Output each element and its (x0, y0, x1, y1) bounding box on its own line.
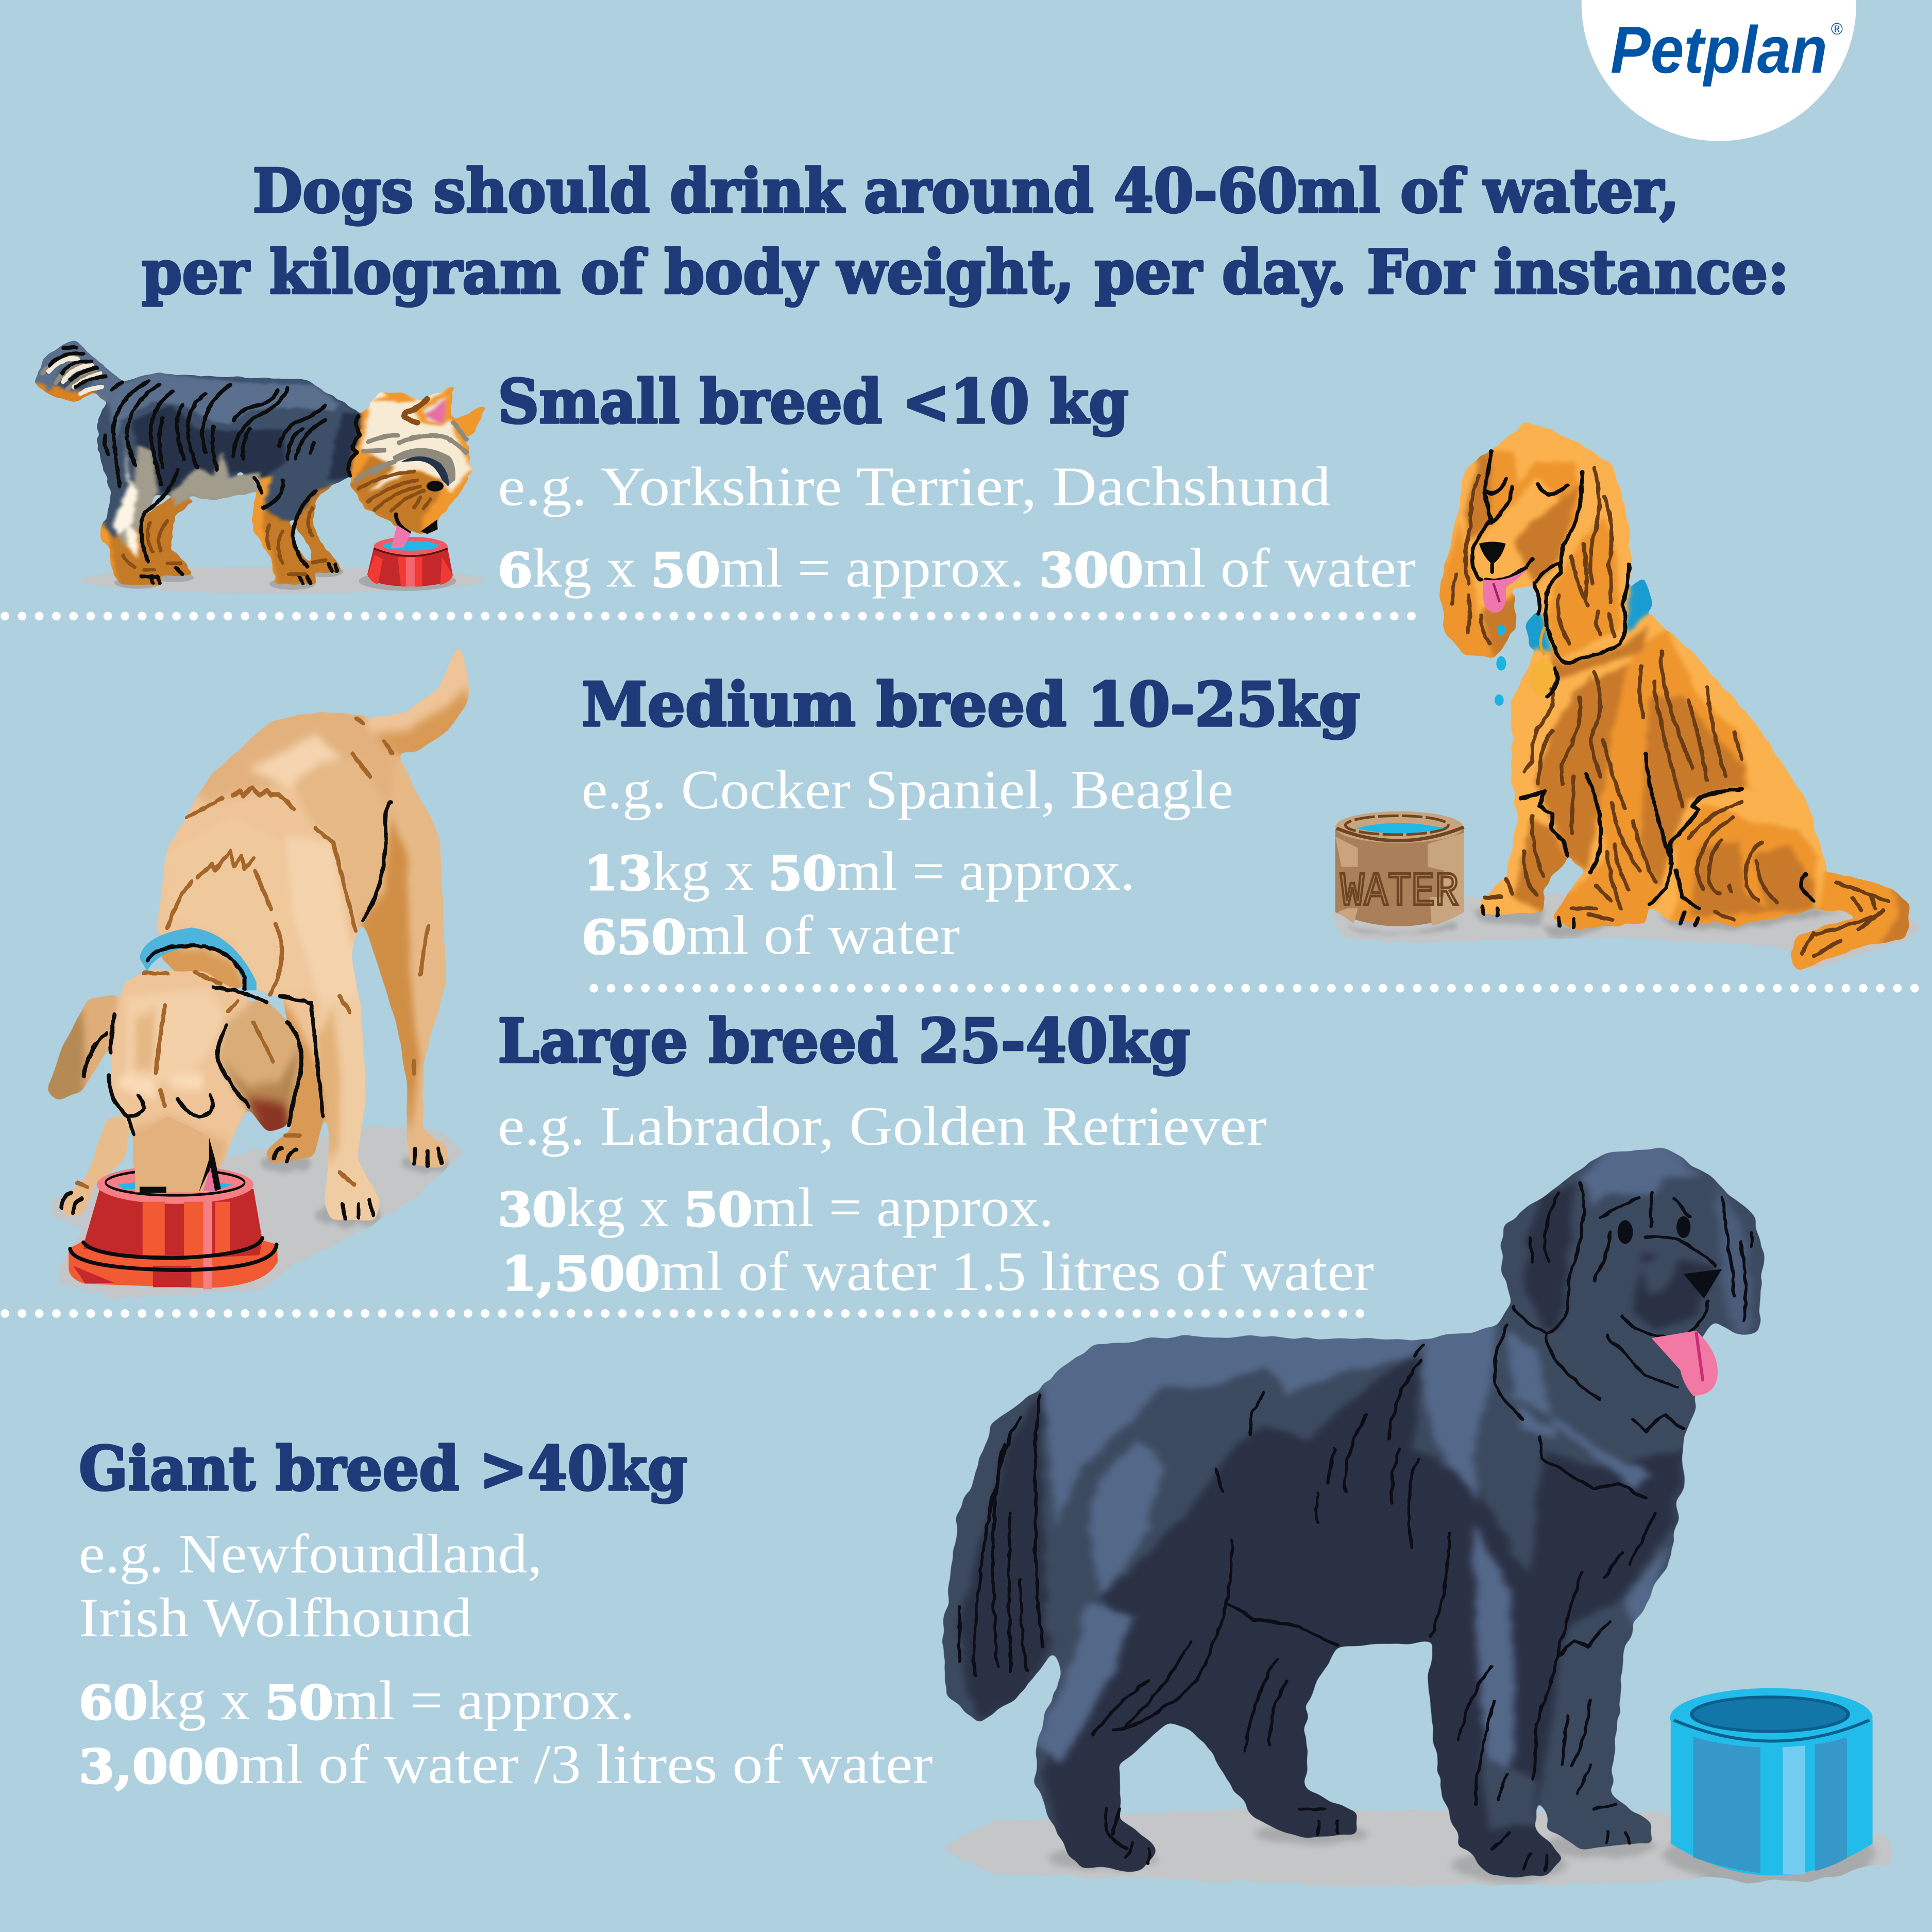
examples: giant breed: e.g. Newfoundland, (79, 1523, 542, 1585)
light back (1043, 1335, 1427, 1528)
dog line work (61, 718, 441, 1219)
logo: Petplan badge: Petplan (1611, 13, 1827, 87)
belly and chest white fur (171, 451, 260, 507)
examples: small breed: e.g. Yorkshire Terrier, Dachshund (498, 456, 1331, 518)
coat (98, 373, 362, 538)
bowl (1670, 1688, 1873, 1875)
illustration: yorkshire terrier drinking (35, 341, 486, 594)
result: large breed: 1,500 ml of water 1.5 litres of water (501, 1241, 1374, 1302)
head base (351, 403, 471, 534)
dog body fills (58, 646, 469, 1219)
logo: Petplan badge: ® (1831, 20, 1843, 38)
heading: medium breed: Medium breed 10-25kg (582, 669, 1360, 740)
ground shadow (51, 1127, 464, 1298)
nose (1684, 1269, 1722, 1299)
result: medium breed: 650 ml of water (582, 905, 960, 966)
water barrel (1335, 811, 1464, 926)
water drops (1495, 624, 1506, 706)
title: per kilogram of body weight, per day. For instance: (142, 236, 1789, 308)
result: giant breed: 3,000 ml of water /3 litres of water (79, 1734, 933, 1795)
title (142, 155, 1789, 308)
head fur (362, 386, 470, 494)
heading: large breed: Large breed 25-40kg (498, 1006, 1190, 1077)
tail (35, 341, 123, 403)
tongue (1651, 1331, 1718, 1396)
dog body fills (943, 1148, 1764, 1875)
dog line work (959, 1183, 1751, 1871)
examples: large breed: e.g. Labrador, Golden Retriever (498, 1096, 1267, 1157)
calculation: small breed: 6kg x 50ml = approx. 300 ml of water (498, 537, 1416, 599)
heading: giant breed: Giant breed >40kg (79, 1433, 688, 1504)
examples: medium breed: e.g. Cocker Spaniel, Beagle (582, 759, 1233, 821)
dark underside (1043, 1350, 1684, 1875)
panel: giant breed text (79, 1433, 933, 1795)
panel: large breed text (498, 1006, 1374, 1302)
title: Dogs should drink around 40-60ml of water, (252, 155, 1680, 226)
head (1568, 1148, 1722, 1341)
bowl (367, 537, 453, 587)
illustration: spaniel with water bowl (1331, 422, 1921, 972)
collar (140, 927, 257, 990)
eye (427, 481, 444, 492)
logo: Petplan badge (1582, 0, 1856, 141)
dog line work (43, 347, 467, 583)
tail (1788, 871, 1910, 972)
dog body fills (35, 341, 486, 584)
tail (943, 1387, 1062, 1723)
bowl (69, 1165, 278, 1290)
nose (420, 520, 438, 534)
examples line 2: giant breed: Irish Wolfhound (79, 1587, 472, 1649)
dog line work (1452, 451, 1888, 956)
calculation: giant breed: 60kg x 50ml = approx. (79, 1670, 635, 1731)
tongue (391, 525, 411, 549)
far ear (455, 405, 486, 437)
heading: small breed: Small breed <10 kg (498, 366, 1129, 437)
near ear (414, 386, 453, 427)
dog body fills (1440, 422, 1910, 972)
tag (1530, 659, 1556, 697)
panel: medium breed text (582, 669, 1360, 966)
collar (1526, 578, 1653, 651)
body (1036, 1148, 1764, 1875)
nose (1479, 541, 1506, 564)
eyes (1618, 1216, 1690, 1244)
ground shadow (1331, 893, 1921, 969)
calculation: large breed: 30kg x 50ml = approx. (498, 1177, 1054, 1239)
ground shadow (940, 1809, 1892, 1886)
muzzle in bowl (134, 1116, 221, 1192)
back legs (141, 493, 194, 575)
front legs (296, 476, 345, 572)
body (1481, 614, 1826, 929)
panel: small breed text (498, 366, 1416, 599)
head fills (46, 971, 299, 1193)
calculation: medium breed: 13kg x 50ml = approx. (584, 841, 1135, 902)
illustration: newfoundland with bowl (940, 1148, 1892, 1886)
water barrel: WATER (1341, 865, 1459, 919)
tongue (1483, 568, 1528, 613)
head (1440, 422, 1631, 665)
ears (1501, 1178, 1587, 1333)
illustration: labrador drinking (46, 646, 469, 1298)
